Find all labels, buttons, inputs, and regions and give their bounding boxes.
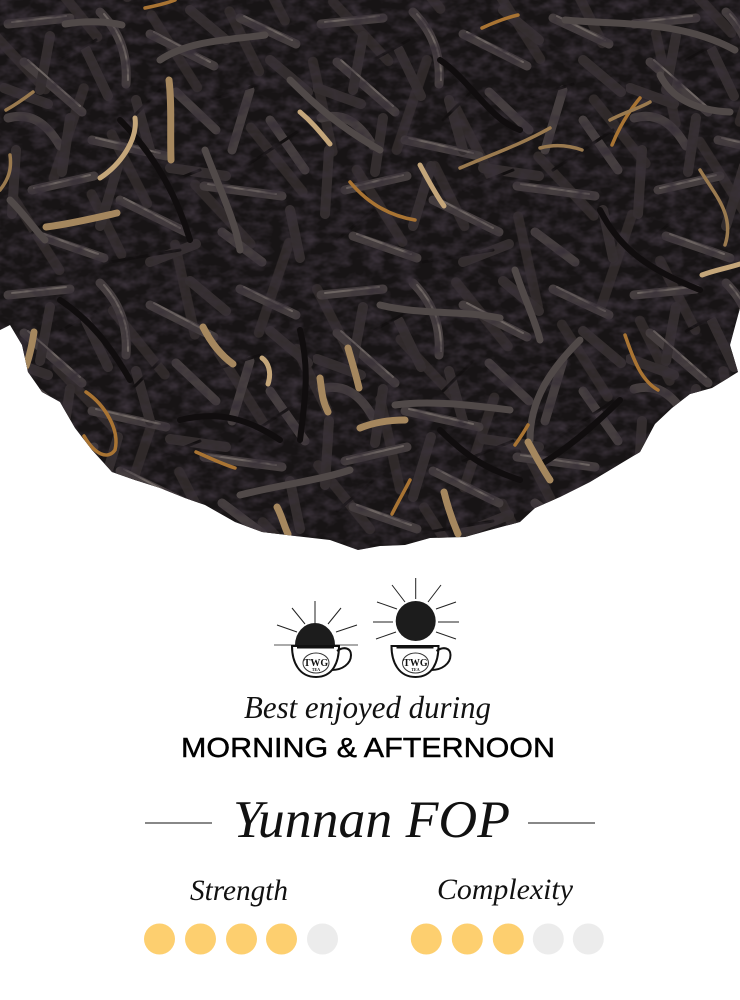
text: morning and afternoon: MORNING & AFTERNOON [181, 732, 555, 763]
rating: complexity [411, 873, 604, 954]
title: Yunnan FOP with side rules: Yunnan FOP [233, 791, 510, 849]
icon: morning half sun and TWG cup: TEA [312, 667, 320, 672]
icon: afternoon full sun and TWG cup: TWG [403, 658, 428, 669]
dots: strength 4 of 5 [144, 924, 338, 954]
label: complexity: Complexity [437, 873, 574, 906]
icon: morning half sun and TWG cup: TWG [304, 658, 328, 669]
photo: tea leaves heap [0, 0, 740, 560]
icon: morning half sun and TWG cup [274, 601, 358, 677]
text: best enjoyed during: Best enjoyed during [244, 689, 491, 725]
dots: complexity 3 of 5 [411, 924, 604, 954]
label: strength: Strength [190, 874, 288, 907]
icon: afternoon full sun and TWG cup: TEA [411, 667, 420, 672]
rating: strength [144, 874, 338, 954]
icon: afternoon full sun and TWG cup [373, 578, 459, 677]
